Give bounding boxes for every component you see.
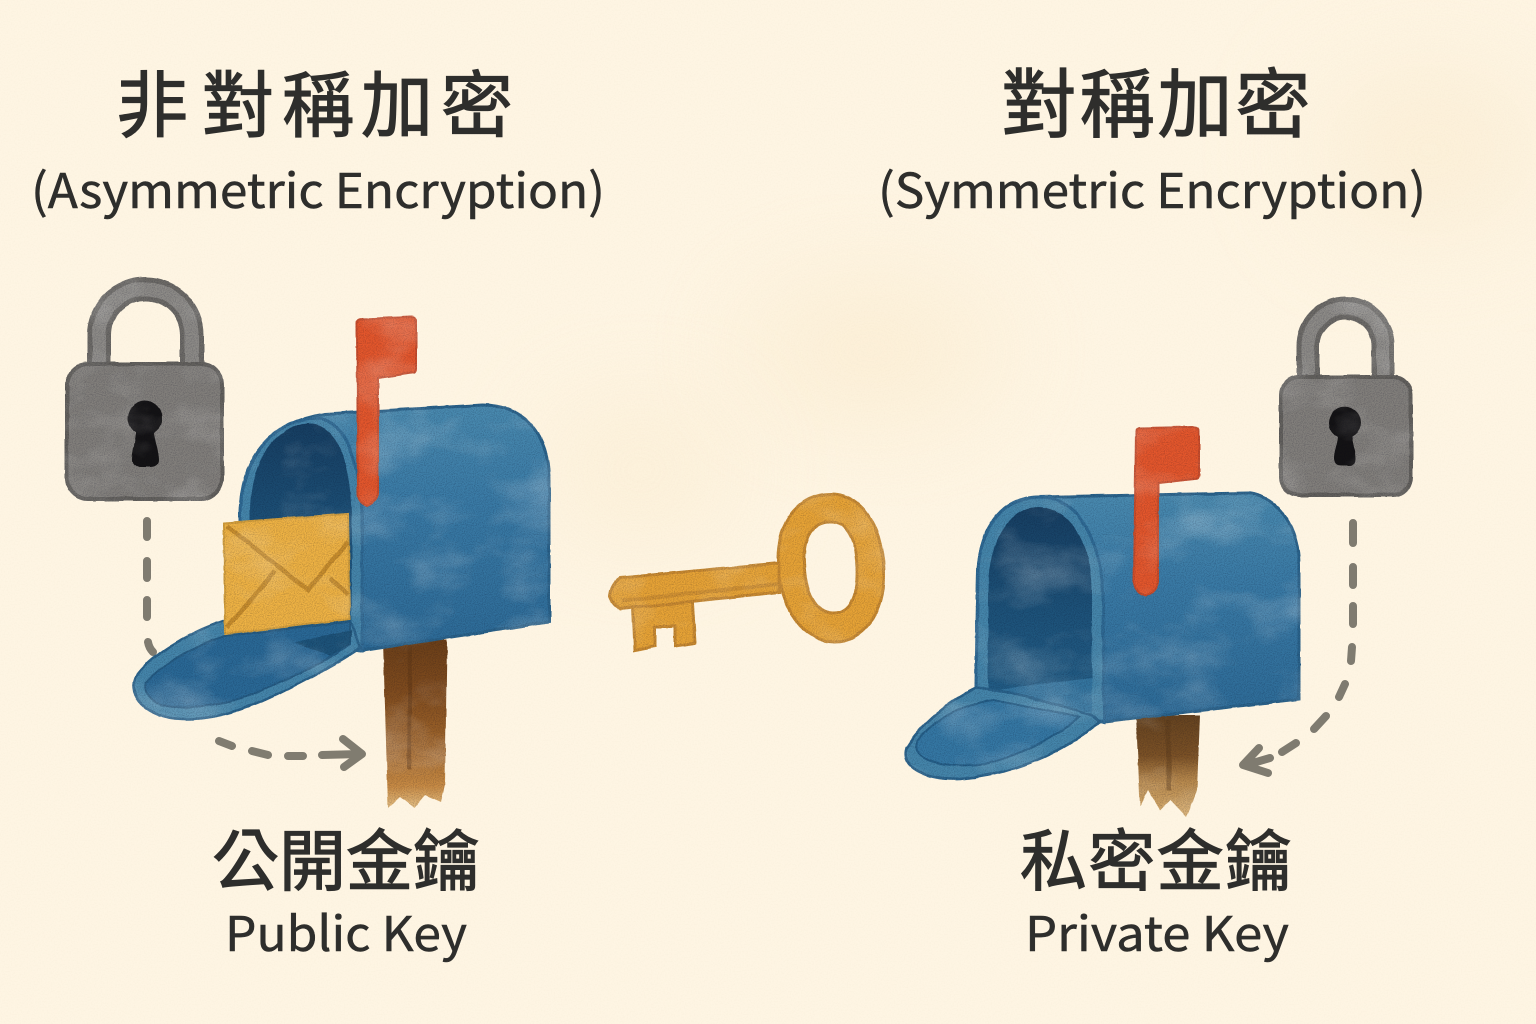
mailbox opening (250, 424, 352, 640)
arrow: left padlock to flap (147, 521, 153, 652)
label: private key: 私密金鑰 (1020, 825, 1292, 900)
label: public key (212, 825, 480, 965)
post (1136, 715, 1200, 817)
door flap (905, 688, 1100, 779)
heading: symmetric encryption (878, 63, 1426, 222)
mailbox: private key (905, 427, 1299, 817)
mailbox rim (240, 418, 362, 651)
flag (357, 317, 416, 506)
label: private key (1020, 825, 1292, 965)
heading: symmetric encryption: 對稱加密 (1002, 63, 1310, 147)
arrow: right padlock to post (1243, 523, 1353, 773)
heading: asymmetric encryption (31, 67, 605, 222)
envelope (224, 514, 350, 634)
post (383, 640, 447, 808)
icon: right padlock (1281, 308, 1411, 495)
mailbox body (240, 405, 549, 651)
icon: left padlock (67, 289, 222, 499)
mailbox floor (1000, 678, 1092, 713)
heading: asymmetric encryption: 非 對稱加密 (116, 67, 513, 147)
icon: golden key (610, 494, 884, 650)
heading: asymmetric encryption: (Asymmetric Encryption) (31, 152, 605, 222)
label: public key: Public Key (225, 895, 467, 965)
mailbox rim (976, 497, 1104, 722)
mailbox opening (988, 507, 1092, 712)
flag (1134, 427, 1199, 596)
label: private key: Private Key (1025, 895, 1289, 965)
heading: symmetric encryption: (Symmetric Encryption) (878, 152, 1426, 222)
label: public key: 公開金鑰 (212, 825, 480, 900)
mailbox: public key (133, 317, 549, 808)
arrow: under left mailbox (219, 739, 362, 767)
mailbox body (976, 493, 1299, 722)
door flap (133, 621, 360, 719)
